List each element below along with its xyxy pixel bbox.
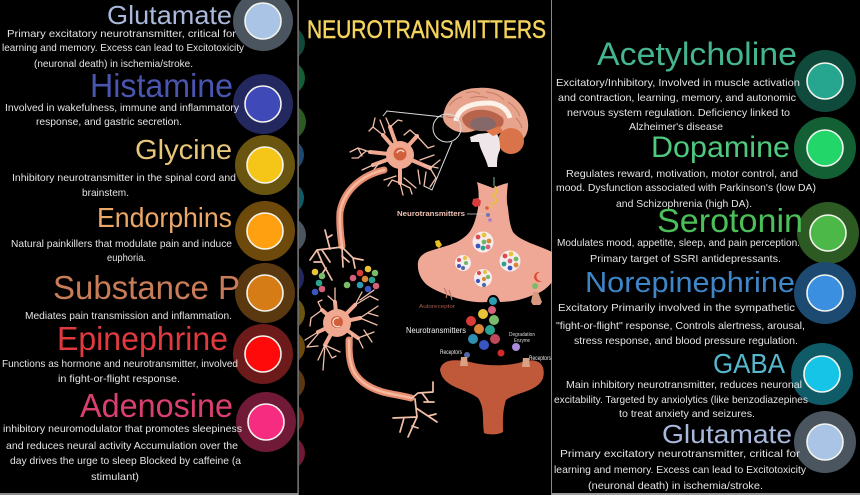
label: receptors right: Receptors <box>529 356 551 362</box>
entry: Substance P: Mediates pain transmission and inflammation. <box>25 310 232 322</box>
icon: brain <box>443 88 528 167</box>
entry: GABA: GABA <box>713 348 785 379</box>
title: NEUROTRANSMITTERS <box>307 16 546 44</box>
entry: Glutamate (repeat): Glutamate <box>662 419 792 449</box>
zoom callout lines <box>383 111 461 190</box>
entry: Epinephrine <box>2 320 293 385</box>
entry: Serotonin: Primary target of SSRI antidepressants. <box>590 253 781 265</box>
entry: Dopamine: Dopamine <box>651 131 790 164</box>
entry: Adenosine: Adenosine <box>80 387 233 424</box>
entry: Acetylcholine: Alzheimer's disease <box>629 121 723 133</box>
entry: Epinephrine: in fight-or-flight response. <box>58 373 180 385</box>
postsynaptic terminal <box>440 357 544 434</box>
entry: Adenosine <box>3 387 296 483</box>
axon: lower neuron <box>349 340 411 398</box>
entry: Glutamate (repeat): learning and memory. Excess can lead to Excitotoxicity <box>554 464 807 476</box>
entry: Endorphins: Endorphins <box>97 202 232 233</box>
label: neurotransmitters upper: Neurotransmitters <box>397 209 465 218</box>
entry: Acetylcholine: Acetylcholine <box>597 36 797 72</box>
entry: Substance P <box>25 263 295 323</box>
entry: Acetylcholine: Excitatory/Inhibitory, Involved in muscle activation <box>556 77 800 89</box>
entry: GABA <box>554 343 853 420</box>
entry: Glycine: Glycine <box>135 134 232 165</box>
entry: Endorphins: Natural painkillers that modulate pain and induce <box>11 238 232 250</box>
entry: Substance P: Substance P <box>53 269 240 306</box>
label: receptors left: Receptors <box>440 350 462 356</box>
entry: Glutamate: Glutamate <box>107 0 232 30</box>
entry: Norepinephrine: stress response, and blood pressure regulation. <box>574 335 798 347</box>
axon terminal: upper neuron <box>310 230 363 280</box>
entry: Dopamine: and Schizophrenia (high DA). <box>616 198 752 210</box>
label: neurotransmitters lower: Neurotransmitters <box>406 326 466 335</box>
axon terminal: lower neuron <box>393 382 437 437</box>
synaptic cleft neurotransmitters <box>464 297 520 358</box>
entry: Histamine: Histamine <box>90 67 233 104</box>
presynaptic terminal <box>418 177 552 310</box>
entry: GABA: Main inhibitory neurotransmitter, reduces neuronal <box>566 379 802 391</box>
neuron: lower <box>305 288 378 370</box>
axon: upper neuron <box>340 170 384 246</box>
entry: Acetylcholine: nervous system regulation. Deficiency linked to <box>567 107 790 119</box>
neurotransmitter dots <box>312 266 379 295</box>
entry: Acetylcholine: and contraction, learning, memory, and autonomic <box>558 92 796 104</box>
entry: Dopamine: Regulates reward, motivation, motor control, and <box>566 168 798 180</box>
label: degradation enzyme: Enzyme <box>514 338 530 344</box>
entry: Adenosine: day drives the urge to sleep Blocked by caffeine (a <box>10 455 241 467</box>
autoreceptor: Autoreceptor <box>419 304 455 310</box>
receptor proteins on neck <box>435 177 497 248</box>
entry: GABA: excitability. Targeted by anxiolytics (like benzodiazepines <box>554 394 808 406</box>
panel: left neurotransmitters <box>0 0 298 495</box>
entry: Epinephrine: Epinephrine <box>57 320 228 357</box>
entry: Serotonin: Serotonin <box>657 202 803 239</box>
entry: Adenosine: and reduces neural activity Accumulation over the <box>6 440 238 452</box>
panel: center diagram <box>299 20 552 466</box>
entry: Glutamate: Primary excitatory neurotransmitter, critical for <box>7 28 237 40</box>
entry: Serotonin <box>557 202 859 265</box>
entry: Endorphins: euphoria. <box>107 252 146 264</box>
entry: Glutamate: learning and memory. Excess can lead to Excitotoxicity <box>2 42 245 54</box>
entry: Norepinephrine <box>556 262 856 347</box>
entry: Glycine <box>12 134 295 199</box>
label: degradation enzyme <box>509 332 535 344</box>
entry: Glycine: brainstem. <box>82 187 129 199</box>
entry: Glycine: Inhibitory neurotransmitter in the spinal cord and <box>12 172 236 184</box>
entry: Norepinephrine: Excitatory Primarily involved in the sympathetic <box>558 302 795 314</box>
entry: Adenosine: stimulant) <box>91 471 139 483</box>
entry: Acetylcholine <box>556 36 856 133</box>
entry: Glutamate (repeat): (neuronal death) in ischemia/stroke. <box>588 480 763 492</box>
entry: Glutamate (repeat): Primary excitatory neurotransmitter, critical for <box>560 448 801 460</box>
entry: Dopamine <box>556 117 856 210</box>
entry: Glutamate: (neuronal death) in ischemia/stroke. <box>34 58 193 70</box>
entry: GABA: to treat anxiety and seizures. <box>619 408 755 420</box>
entry: Histamine: response, and gastric secretion. <box>36 116 182 128</box>
entry: Epinephrine: Functions as hormone and neurotransmitter, involved <box>2 358 238 370</box>
entry: Glutamate <box>2 0 293 70</box>
panel: right neurotransmitters <box>552 0 860 495</box>
label: degradation enzyme: Degradation <box>509 332 535 338</box>
entry: Adenosine: inhibitory neuromodulator that promotes sleepiness <box>3 423 242 435</box>
entry: Dopamine: mood. Dysfunction associated with Parkinson's (low DA) <box>556 182 816 194</box>
entry: Endorphins <box>11 201 295 264</box>
peeking circles at panel edge <box>299 30 306 466</box>
entry: Norepinephrine: Norepinephrine <box>585 267 795 299</box>
entry: Glutamate (repeat) <box>554 411 856 492</box>
entry: Norepinephrine: "fight-or-flight" response, Controls alertness, arousal, <box>556 320 805 332</box>
reuptake transporter <box>531 272 542 305</box>
neuron: upper <box>350 118 440 195</box>
entry: Histamine <box>5 67 293 134</box>
entry: Serotonin: Modulates mood, appetite, sleep, and pain perception. <box>557 237 800 249</box>
vesicles <box>455 232 520 287</box>
entry: Histamine: Involved in wakefulness, immune and inflammatory <box>5 102 240 114</box>
